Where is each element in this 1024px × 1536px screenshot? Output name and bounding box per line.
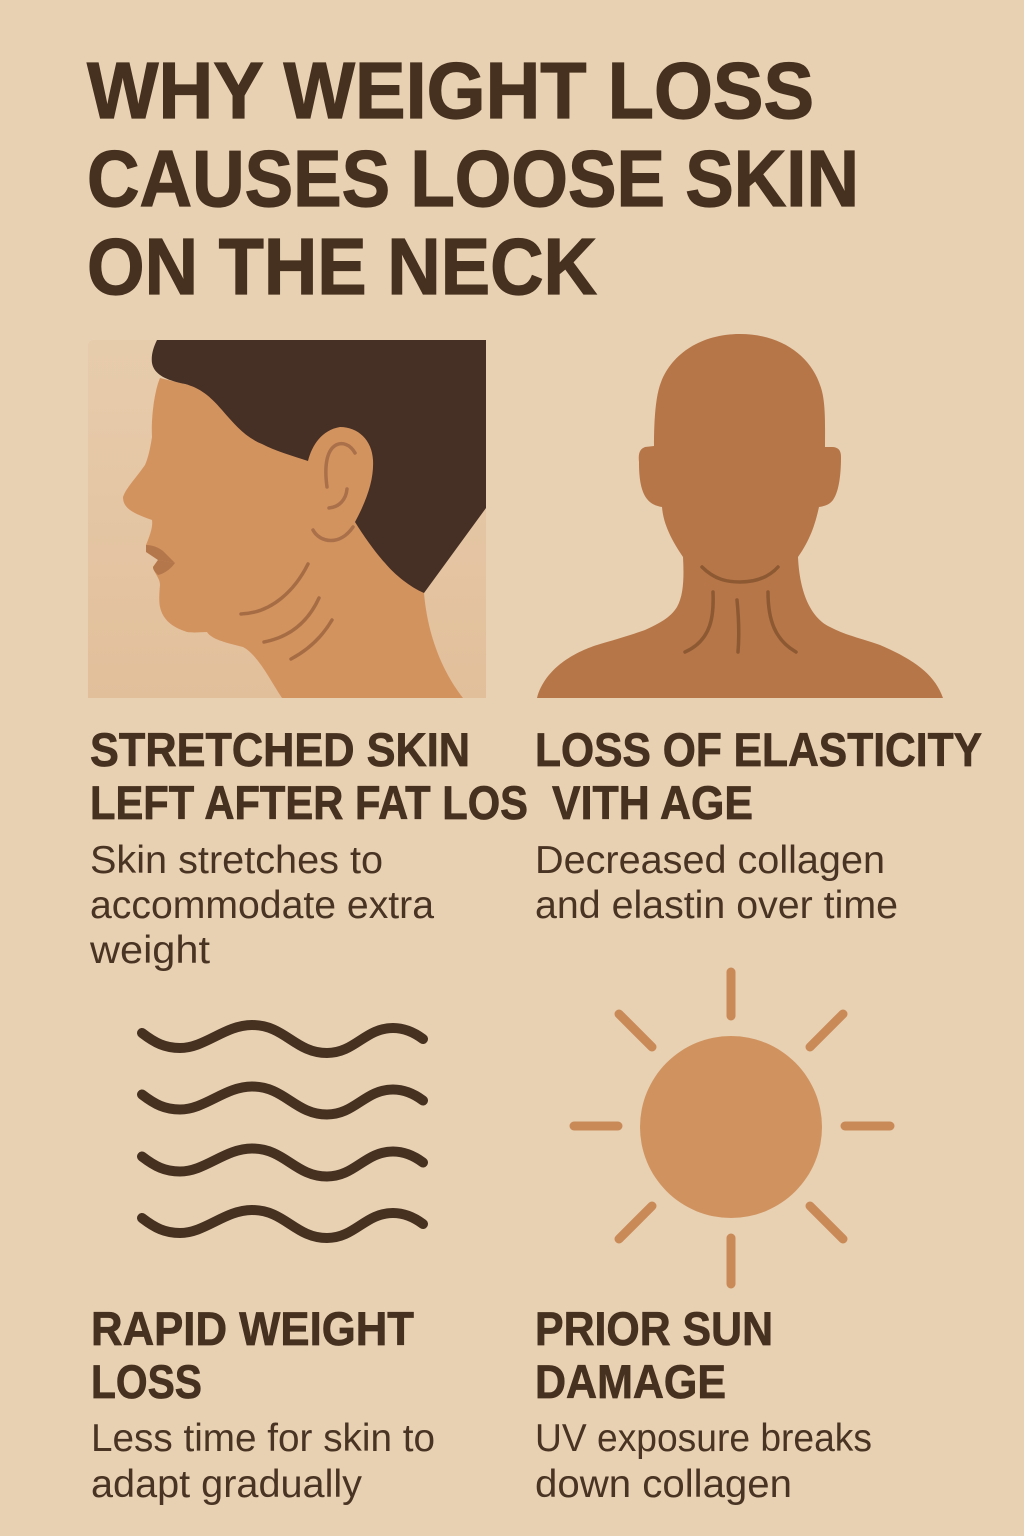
lips	[146, 545, 175, 563]
heading: rapid weight loss: LOSS	[91, 1355, 202, 1408]
text: rapid loss description: adapt gradually	[91, 1463, 363, 1506]
text: elasticity description: Decreased collagen	[535, 839, 885, 882]
text: sun damage description: UV exposure breaks	[535, 1417, 872, 1460]
title	[87, 46, 859, 311]
text: sun damage description: down collagen	[535, 1463, 792, 1506]
heading: stretched skin: LEFT AFTER FAT LOS	[90, 776, 528, 829]
heading: loss of elasticity	[535, 723, 982, 829]
heading: stretched skin	[90, 723, 528, 829]
heading: loss of elasticity: LOSS OF ELASTICITY	[535, 723, 982, 776]
heading: rapid weight loss	[91, 1302, 414, 1408]
title: CAUSES LOOSE SKIN	[87, 134, 859, 223]
text: rapid loss description	[91, 1417, 435, 1506]
text: stretched skin description: accommodate extra	[90, 884, 434, 927]
text: stretched skin description: Skin stretches to	[90, 839, 383, 882]
text: stretched skin description	[89, 839, 434, 972]
panel background	[88, 340, 486, 698]
text: sun damage description	[535, 1417, 872, 1506]
illustration: back of head	[537, 334, 943, 698]
title: WHY WEIGHT LOSS	[87, 46, 814, 135]
illustration: side profile neck	[88, 340, 486, 698]
text: elasticity description	[535, 839, 898, 927]
heading: loss of elasticity: VITH AGE	[552, 776, 753, 829]
heading: prior sun damage: PRIOR SUN	[535, 1302, 773, 1355]
neck wrinkles	[685, 567, 796, 652]
text: stretched skin description: weight	[89, 929, 210, 972]
neck wrinkles	[241, 564, 332, 659]
icon: sun	[574, 972, 890, 1284]
hair	[152, 340, 486, 593]
title: ON THE NECK	[87, 222, 597, 311]
text: elasticity description: and elastin over time	[535, 884, 898, 927]
ear	[308, 427, 373, 530]
face and neck	[123, 378, 463, 698]
ear and jaw lines	[313, 444, 355, 540]
heading: prior sun damage	[535, 1302, 773, 1408]
text: rapid loss description: Less time for skin to	[91, 1417, 435, 1460]
heading: rapid weight loss: RAPID WEIGHT	[91, 1302, 414, 1355]
icon: wavy lines	[142, 1025, 423, 1238]
heading: stretched skin: STRETCHED SKIN	[90, 723, 470, 776]
heading: prior sun damage: DAMAGE	[535, 1355, 726, 1408]
